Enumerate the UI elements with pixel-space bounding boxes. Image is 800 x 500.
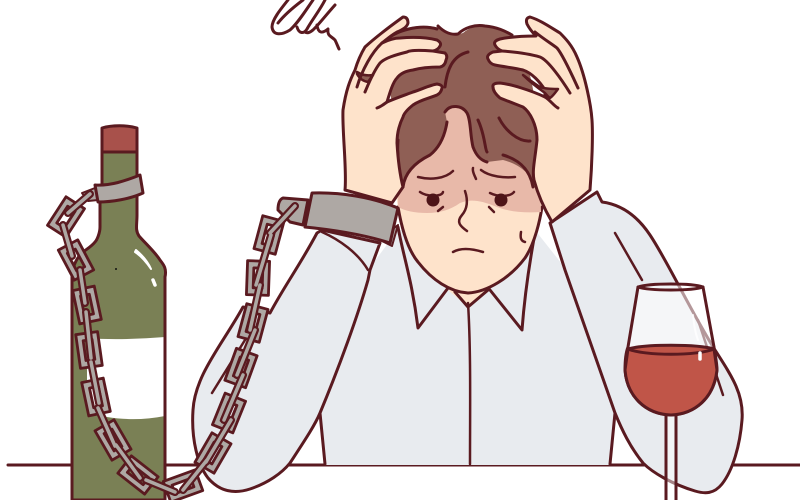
table edge: [8, 464, 800, 466]
hair outlines: [384, 25, 533, 187]
left hand: [343, 17, 447, 203]
shadow band over face: [398, 100, 541, 213]
shirt torso: [320, 230, 615, 465]
cuff: viewer left wrist: [278, 193, 398, 246]
shirt sleeve: viewer left arm: [193, 230, 380, 491]
torso side seams: [320, 413, 615, 464]
wine glass: [625, 284, 717, 500]
bottle collar: [82, 175, 143, 202]
scribble above head: [272, 0, 339, 49]
right hand: [488, 17, 592, 222]
wine bottle: [72, 126, 166, 500]
shirt sleeve: viewer right arm: [550, 192, 742, 493]
shirt collar: [398, 227, 535, 464]
neck and face: [396, 100, 542, 293]
chin outline: [398, 207, 542, 293]
hair: [382, 25, 537, 187]
face: eyebrows, eyes, nose, mouth: [418, 168, 525, 252]
chain: [48, 194, 295, 500]
